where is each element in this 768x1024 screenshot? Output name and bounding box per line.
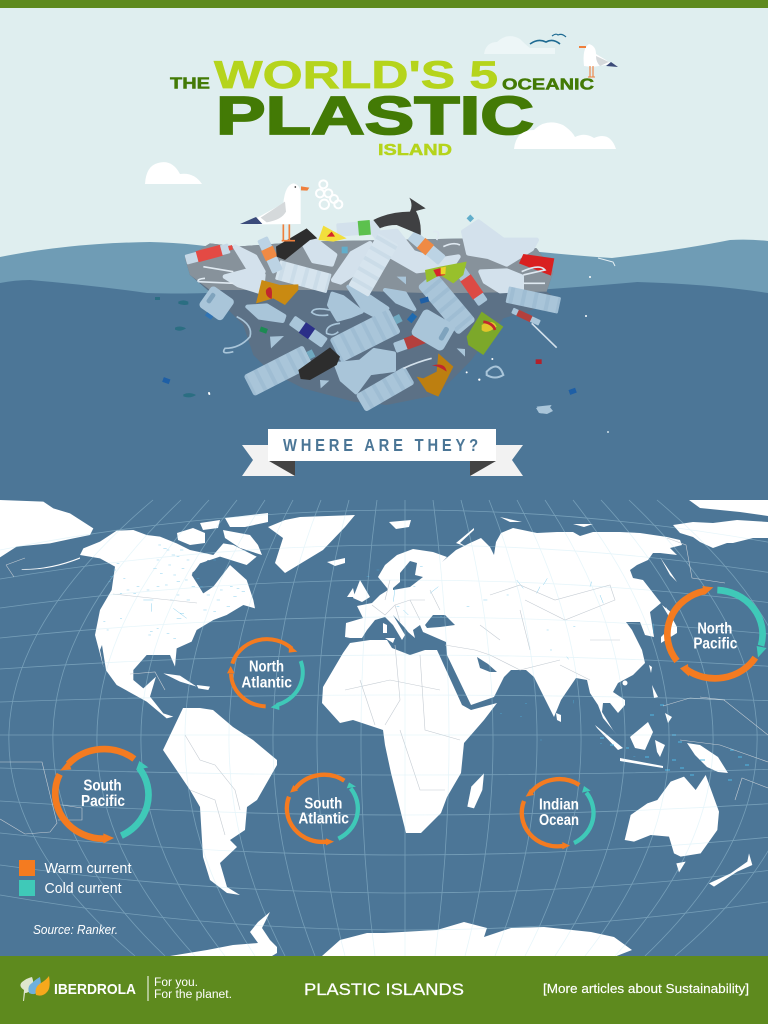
island body [185,238,560,405]
taiwan hainan sri lanka [649,665,652,673]
legend: Warm current [44,860,132,877]
current ring: indian ocean: Indian [539,796,579,813]
title: PLASTIC [216,86,534,146]
icon: seagull on the island [240,183,309,241]
south america [163,708,277,895]
current ring: south pacific [55,749,149,843]
current ring: south pacific: Pacific [81,793,125,810]
footer [0,956,768,1024]
cloud over title [514,122,616,149]
japan [661,607,677,643]
legend [19,860,132,897]
inland seas [100,560,497,672]
title [170,54,595,159]
world map [0,500,768,957]
sea: lower wave and deep ocean [0,280,768,960]
legend: Cold current [44,880,122,897]
coastal specks southeast asia [600,705,749,780]
clouds [145,36,555,184]
current ring: north atlantic [227,639,303,710]
kamchatka sliver and arctic russia islands [660,557,677,582]
current ring: south atlantic: South [304,795,342,812]
plastic bags [225,222,537,292]
plastic bottles [184,219,561,412]
arctic islands [177,528,205,545]
icon: flying birds [530,34,566,44]
icon: six-pack rings [316,180,342,209]
top bar [0,0,768,8]
current ring: south atlantic: Atlantic [298,810,349,827]
banner: where are they: WHERE ARE THEY? [283,436,478,455]
eurasia [345,528,682,735]
title: ISLAND [378,142,452,159]
footer: [More articles about Sustainability] [543,981,749,996]
small plastic fragments [259,215,552,413]
sea: upper wave [0,240,768,320]
footer: PLASTIC ISLANDS [304,980,464,999]
plastic island [175,180,561,413]
antarctica [170,912,277,956]
banner: where are they [242,429,523,476]
current ring: north atlantic: North [249,659,284,676]
black plastic containers [276,228,340,380]
white specks [208,358,493,395]
chip packets [256,226,554,397]
footer: For the planet. [154,989,232,1001]
tiny fish [175,300,196,397]
current ring: north pacific [667,586,767,678]
southeast asia islands [595,725,623,750]
current ring: indian ocean: Ocean [539,812,579,829]
current ring: south pacific: South [83,778,122,795]
current ring: north atlantic: Atlantic [241,674,292,691]
icon: iberdrola leaves logo [20,976,50,1001]
title: OCEANIC [502,76,595,94]
title: WORLD'S 5 [214,54,498,97]
current ring: north pacific: North [697,620,732,637]
footer: For you. [154,977,198,989]
map grid [0,500,768,956]
current ring: north pacific: Pacific [693,635,738,652]
lakes and rivers [103,545,653,757]
plastic jugs [196,285,457,352]
current ring: indian ocean [522,779,594,849]
source note: Source: Ranker. [33,922,118,937]
british isles [353,580,370,602]
africa [322,640,497,833]
continents [0,500,768,957]
current ring: south atlantic [287,775,358,845]
icon: seagull on title [579,44,618,77]
floating debris outside the island [155,258,615,433]
pacific maritime boundaries [0,538,768,834]
greenland [268,515,355,573]
plastic bag handles [198,231,545,283]
mediterranean islands [385,638,395,643]
chukotka and far east [673,520,768,548]
iceland [327,558,345,566]
north america and arctic [0,500,257,718]
country borders [0,538,768,835]
icon: whale tail [373,198,426,235]
footer: IBERDROLA [54,981,136,998]
sky background [0,0,768,300]
southern landmasses [467,773,752,887]
title: THE [170,76,210,92]
